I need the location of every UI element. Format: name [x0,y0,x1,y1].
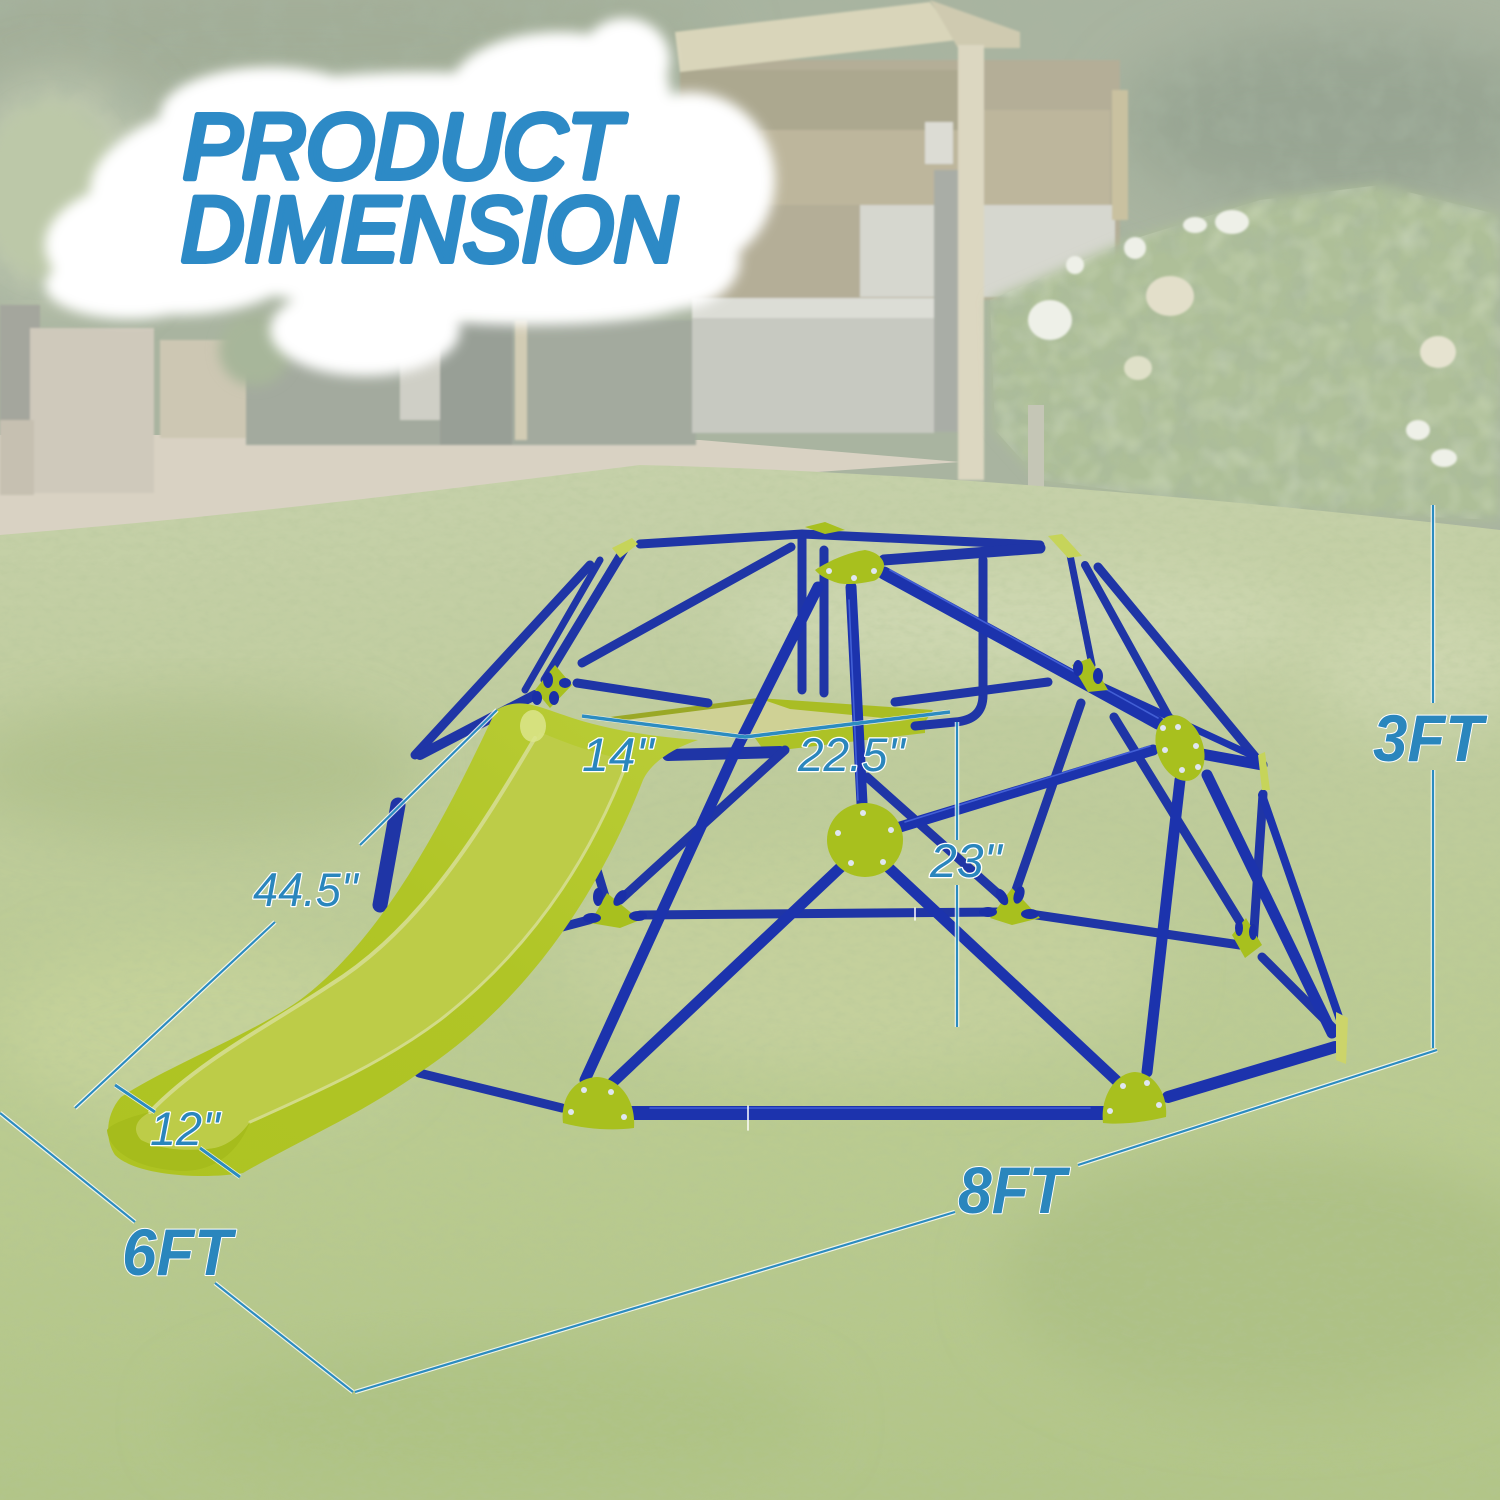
width line [0,1113,353,1392]
label: 6FT: 6FT [122,1215,236,1289]
dimension labels [122,701,1487,1289]
background: lawn [0,465,1500,1500]
tube highlights [650,570,1158,1108]
background: planters [160,320,696,445]
plate: right hub [1147,708,1213,788]
background: hydrangea bushes [990,185,1500,520]
small plates [535,522,1348,1064]
label: 12 inches: 12'' [150,1102,222,1155]
green slide [107,703,698,1176]
front struts [585,573,1340,1113]
title line: PRODUCT: PRODUCT [183,96,627,198]
connector fork ends [532,660,1257,940]
background: patio floor [0,435,960,540]
slide inner channel [136,732,628,1150]
plate: center hub [827,803,903,877]
label: 8FT: 8FT [958,1153,1070,1227]
back struts [380,535,1335,1108]
background: left plants [0,100,291,386]
plate: front top [815,550,884,584]
white cloud behind title [45,18,775,376]
background: pergola [675,0,1128,480]
connector plates [535,522,1348,1129]
background: wicker sofa [0,305,154,495]
label: 22.5 inches: 22.5'' [797,728,907,781]
background: trees texture [0,0,1500,300]
label: 44.5 inches: 44.5'' [253,863,360,916]
dimension lines [0,505,1437,1392]
label: 23 inches: 23'' [929,834,1004,887]
slide length line [75,710,497,1108]
slide channel right ridge [250,760,628,1122]
height line [1432,505,1434,1048]
title line: DIMENSION: DIMENSION [181,179,678,281]
net width lines [582,712,950,737]
slide width line [115,1085,240,1177]
slide channel left ridge [150,738,535,1112]
plate: bottom left [563,1077,634,1129]
dimension line halos [0,505,1437,1392]
mesh climbing net [610,698,933,752]
slide body [108,703,698,1176]
length line [355,1050,1437,1392]
bar joint ticks [748,908,915,1130]
climbing dome [107,522,1348,1176]
slide foot [107,1112,250,1171]
background: grass texture [0,465,1500,1500]
title [181,96,678,281]
dimension line strokes [0,505,1437,1392]
plate: bottom right [1103,1072,1166,1124]
background: lawn shading [0,560,1500,1490]
label: 14 inches: 14'' [582,728,656,781]
top ring struts [415,534,1262,765]
net height line [956,722,958,1027]
label: 3FT: 3FT [1373,701,1487,775]
slide highlight [520,710,546,742]
